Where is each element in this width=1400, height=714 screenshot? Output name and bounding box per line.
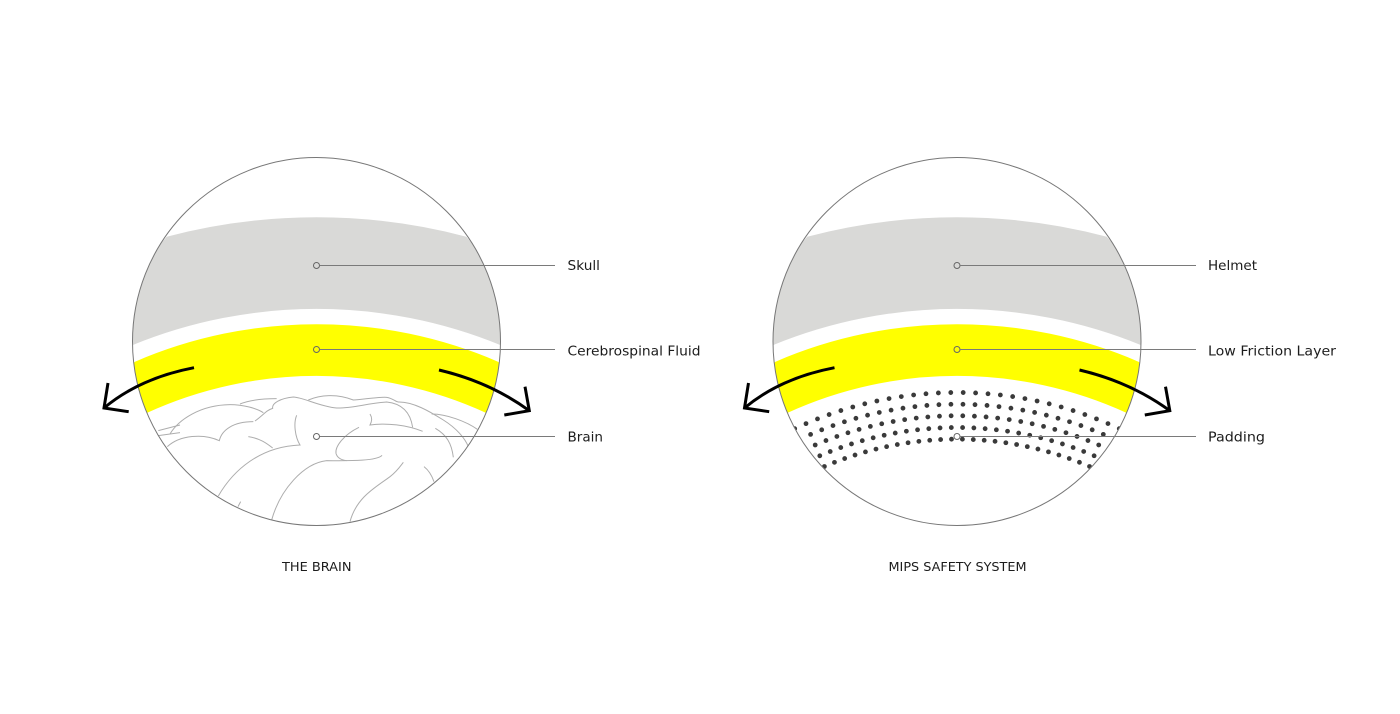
callout: cerebrospinal fluid bbox=[314, 343, 700, 359]
arrow: right rotation bbox=[1080, 370, 1170, 415]
panel title: MIPS SAFETY SYSTEM bbox=[888, 560, 1026, 574]
circle outline bbox=[773, 158, 1141, 526]
callout: helmet: Helmet bbox=[1208, 258, 1257, 274]
callout: low friction layer: Low Friction Layer bbox=[1208, 343, 1336, 359]
callout: cerebrospinal fluid: Cerebrospinal Fluid bbox=[568, 343, 700, 359]
circle outline bbox=[132, 158, 500, 526]
callout: skull bbox=[314, 258, 600, 274]
padding dots bbox=[795, 393, 1119, 466]
arrow: left rotation bbox=[104, 368, 194, 412]
callout: padding: Padding bbox=[1208, 430, 1265, 446]
arrow: right rotation bbox=[439, 370, 529, 415]
low friction layer bbox=[754, 324, 1160, 413]
callout: skull: Skull bbox=[568, 258, 600, 274]
panel: mips safety system bbox=[744, 158, 1336, 574]
arrow: left rotation bbox=[744, 368, 834, 412]
brain outline drawing bbox=[158, 396, 477, 522]
skull layer bbox=[113, 217, 520, 345]
callout: brain bbox=[314, 430, 603, 446]
callout: padding bbox=[954, 430, 1265, 446]
helmet layer bbox=[754, 217, 1160, 345]
callout: brain: Brain bbox=[568, 430, 603, 446]
cerebrospinal fluid layer bbox=[113, 324, 520, 413]
panel title: THE BRAIN bbox=[281, 560, 352, 574]
callout: helmet bbox=[954, 258, 1257, 274]
panel: the brain bbox=[104, 158, 700, 574]
callout: low friction layer bbox=[954, 343, 1336, 359]
